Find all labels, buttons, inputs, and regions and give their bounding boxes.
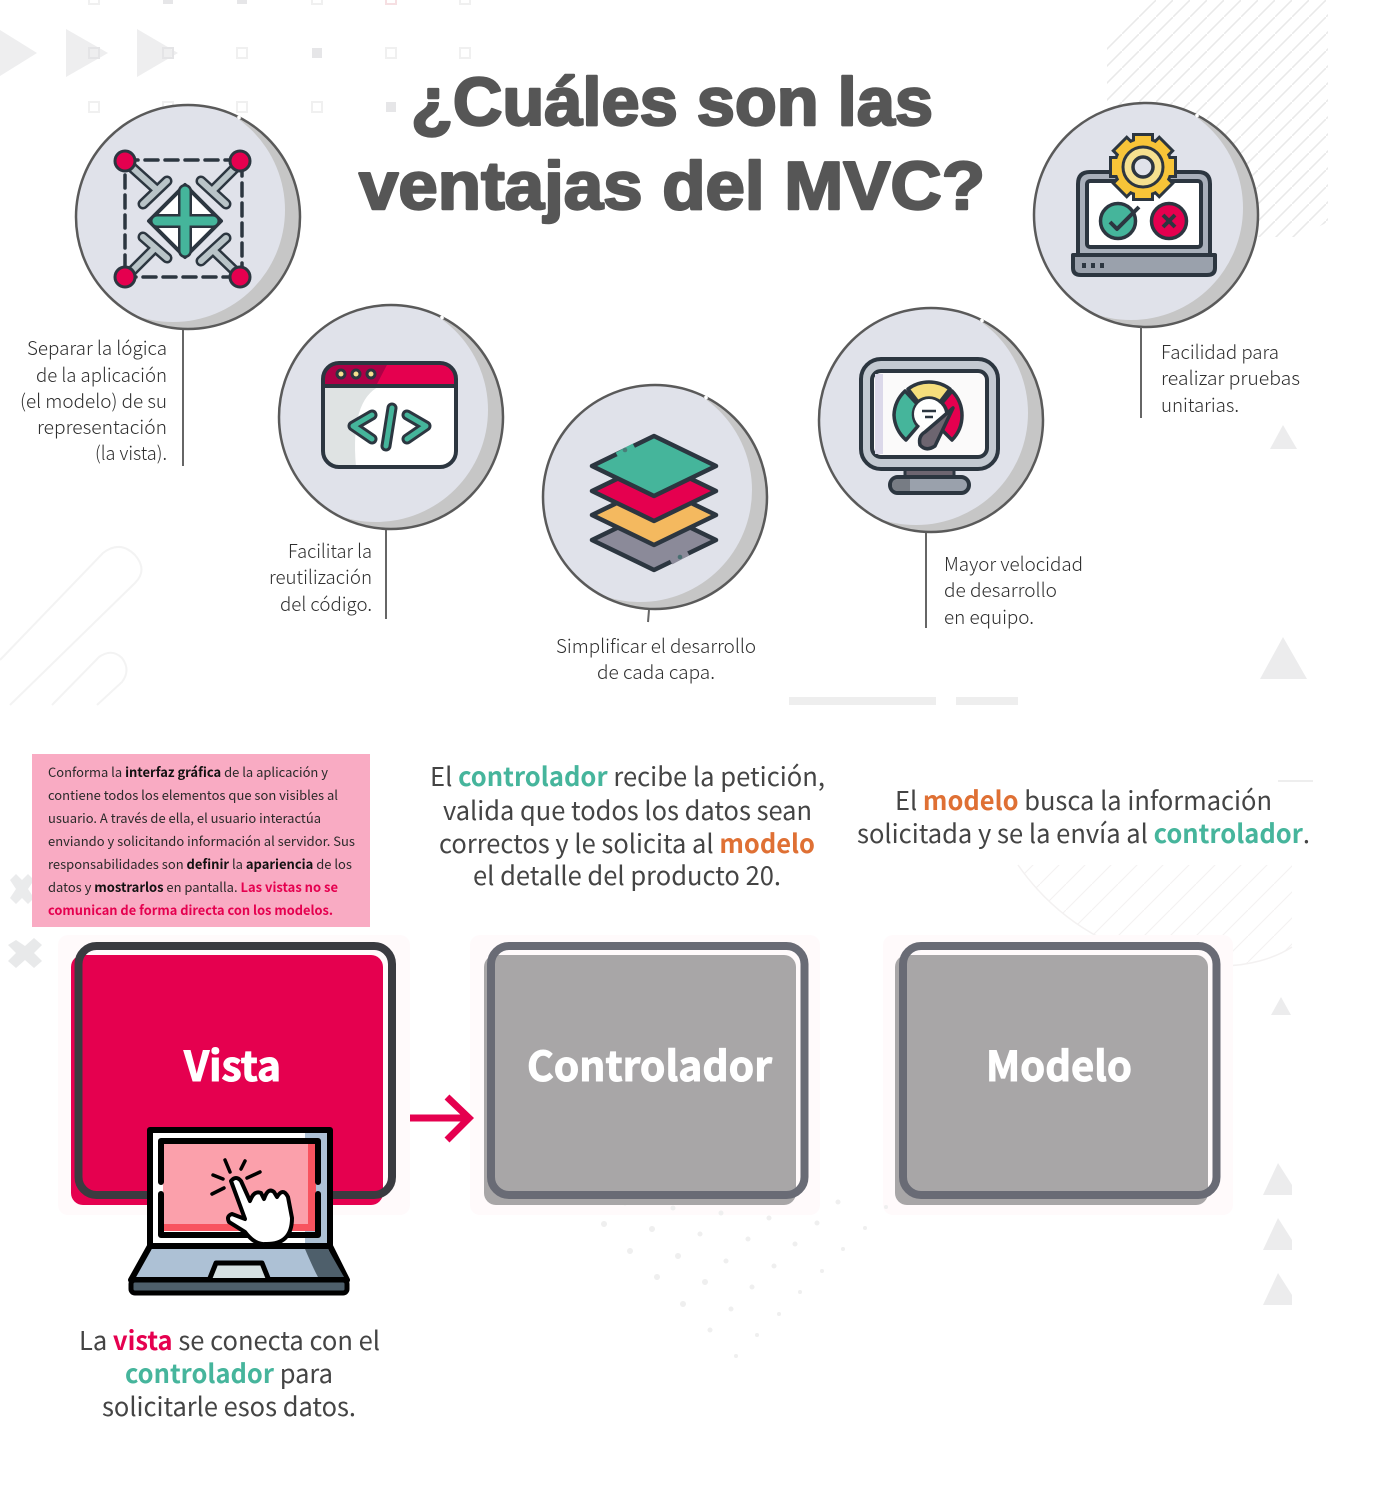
label: modelo: Modelo [986, 1033, 1132, 1093]
circle badge 5 [1019, 96, 1258, 327]
arrow: vista to controlador [410, 1097, 469, 1140]
text: controlador step: correctos y le solicita al modelo [439, 824, 815, 861]
callout: vista description: contiene todos los elementos que son visibles al [48, 785, 338, 804]
text: simplificar [556, 632, 756, 685]
callout: vista description [32, 754, 370, 927]
text: simplificar: Simplificar el desarrollo [556, 632, 756, 659]
text: separar la lógica: Separar la lógica [27, 334, 167, 361]
text: separar la lógica: (el modelo) de su [20, 387, 167, 414]
text: facilidad para pruebas [1161, 338, 1300, 418]
label: controlador: Controlador [527, 1033, 772, 1093]
icon: laptop with clicking hand [131, 1130, 347, 1293]
text: controlador step [430, 757, 825, 893]
panel: modelo box [895, 946, 1216, 1205]
callout: vista description: Conforma la interfaz gráfica de la aplicación y [48, 762, 328, 781]
circle badge 1 [61, 98, 300, 329]
text: vista step: solicitarle esos datos. [102, 1387, 356, 1424]
panel: advantage 3 simplify layers [528, 378, 767, 685]
callout: vista description: comunican de forma directa con los modelos. [48, 900, 333, 919]
text: modelo step [857, 781, 1310, 851]
text: separar la lógica [20, 334, 167, 466]
text: mayor velocidad: en equipo. [944, 603, 1034, 630]
title: ¿Cuáles son las [411, 64, 933, 140]
text: controlador step: el detalle del producto 20. [473, 856, 781, 893]
panel: advantage 1 separate logic [20, 98, 300, 466]
panel: advantage 2 code reuse [264, 298, 503, 619]
connector line 5 [1140, 327, 1142, 418]
callout: vista description: enviando y solicitando información al servidor. Sus [48, 831, 355, 850]
text: facilitar la reutilización: Facilitar la [288, 537, 372, 564]
text: modelo step: El modelo busca la información [895, 781, 1272, 818]
panel: advantage 5 unit tests [1019, 96, 1300, 418]
text: facilitar la reutilización: del código. [280, 590, 372, 617]
text: facilidad para pruebas: realizar pruebas [1161, 364, 1300, 391]
label: vista: Vista [183, 1033, 281, 1093]
panel: controlador box [484, 946, 804, 1205]
connector line 3 [648, 610, 649, 622]
connector line 2 [385, 530, 387, 619]
callout: vista description: usuario. A través de ella, el usuario interactúa [48, 808, 321, 827]
circle badge 3 [528, 378, 767, 609]
callout: vista description: datos y mostrarlos en pantalla. Las vistas no se [48, 877, 338, 896]
text: mayor velocidad: de desarrollo [944, 576, 1057, 603]
text: facilitar la reutilización: reutilización [269, 563, 372, 590]
text: separar la lógica: de la aplicación [36, 361, 167, 388]
text: vista step: controlador para [125, 1354, 333, 1391]
text: facilidad para pruebas: unitarias. [1161, 391, 1239, 418]
text: separar la lógica: representación [37, 413, 167, 440]
text: facilitar la reutilización [269, 537, 372, 617]
text: vista step: La vista se conecta con el [79, 1321, 380, 1358]
icon: stacked layers [592, 436, 716, 570]
icon: gear [1109, 133, 1177, 201]
text: simplificar: de cada capa. [597, 658, 715, 685]
card backdrops [58, 935, 1233, 1215]
text: mayor velocidad [944, 550, 1083, 630]
text: modelo step: solicitada y se la envía al controlador. [857, 814, 1310, 851]
callout: vista description: responsabilidades son definir la apariencia de los [48, 854, 352, 873]
text: controlador step: El controlador recibe la petición, [430, 757, 825, 794]
icon: resize cross [115, 151, 250, 287]
circle badge 2 [264, 298, 503, 529]
text: vista step [79, 1321, 380, 1424]
dotted diamond pattern [574, 1194, 888, 1358]
panel: advantage 4 team speed [804, 301, 1083, 630]
text: controlador step: valida que todos los datos sean [443, 791, 812, 828]
text: separar la lógica: (la vista). [95, 439, 167, 466]
text: mayor velocidad: Mayor velocidad [944, 550, 1083, 577]
title: ventajas del MVC? [359, 148, 985, 224]
connector line 4 [925, 533, 927, 628]
text: facilidad para pruebas: Facilidad para [1161, 338, 1279, 365]
title [359, 64, 985, 224]
icon: speedometer monitor [861, 359, 998, 493]
connector line 1 [182, 330, 184, 466]
icon: code window [323, 363, 456, 467]
circle badge 4 [804, 301, 1043, 532]
icon: laptop with checks [1073, 172, 1215, 275]
panel: vista box [71, 946, 392, 1205]
